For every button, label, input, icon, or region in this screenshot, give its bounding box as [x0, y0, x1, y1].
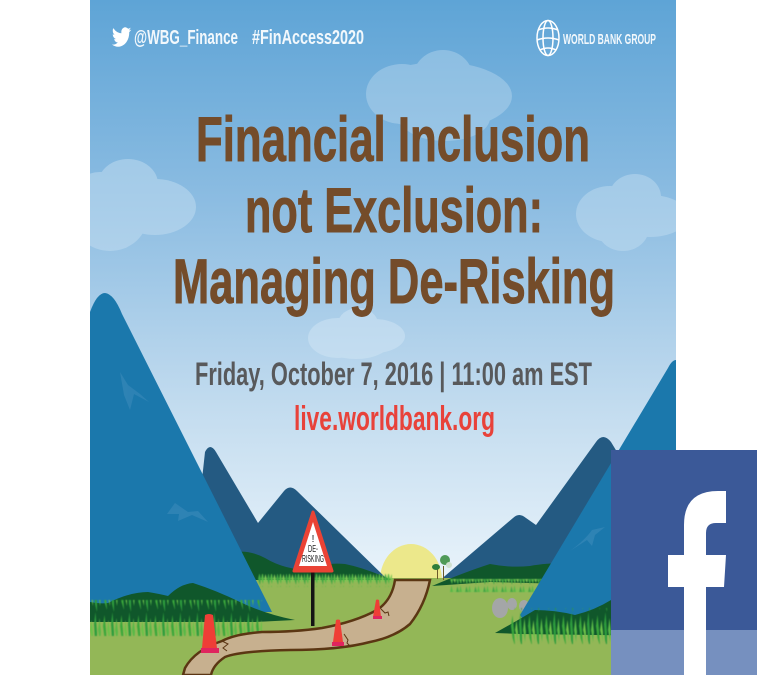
background mountains left [202, 447, 385, 577]
rocks [492, 598, 529, 618]
cloud: right [576, 174, 676, 251]
right foreground grass [510, 608, 620, 644]
back grass strips [258, 574, 545, 592]
icon: Facebook logo [611, 450, 757, 675]
title: not Exclusion: [245, 176, 543, 246]
social handle: @WBG_Finance [134, 27, 238, 49]
traffic cone: small [373, 600, 382, 619]
icon: World Bank globe [537, 20, 559, 56]
cloud: top centre [366, 50, 512, 141]
event URL: live.worldbank.org [294, 400, 495, 438]
World Bank Group wordmark: WORLD BANK GROUP [563, 31, 656, 48]
warning sign [294, 512, 332, 571]
traffic cone: large [201, 614, 219, 653]
left foreground hill [90, 583, 295, 622]
back hill left [235, 552, 392, 580]
sky background [90, 0, 676, 585]
left foreground mountain [90, 293, 272, 612]
title: Financial Inclusion [196, 105, 590, 175]
background mountains right [442, 437, 616, 578]
hashtag: #FinAccess2020 [252, 27, 364, 49]
cloud: left [90, 159, 196, 251]
warning sign: ! [312, 534, 314, 545]
icon: twitter bird [112, 27, 131, 47]
traffic cone: middle [332, 620, 344, 646]
title [173, 105, 615, 317]
left foreground grass [90, 600, 262, 636]
illustrated poster scene [70, 0, 688, 675]
warning sign: DE- [308, 544, 318, 555]
road [183, 580, 430, 675]
sign post [311, 570, 314, 626]
back hill right [432, 564, 551, 586]
event date and time: Friday, October 7, 2016 | 11:00 am EST [195, 356, 592, 392]
cloud: small centre [308, 308, 405, 359]
sun [380, 544, 442, 580]
road cracks [222, 609, 389, 651]
faint birds on mountains [120, 372, 605, 551]
right foreground mountain [520, 360, 676, 630]
warning sign: RISKING [302, 554, 324, 565]
ground [90, 578, 611, 675]
trees [432, 555, 452, 580]
right foreground hill [495, 600, 611, 636]
